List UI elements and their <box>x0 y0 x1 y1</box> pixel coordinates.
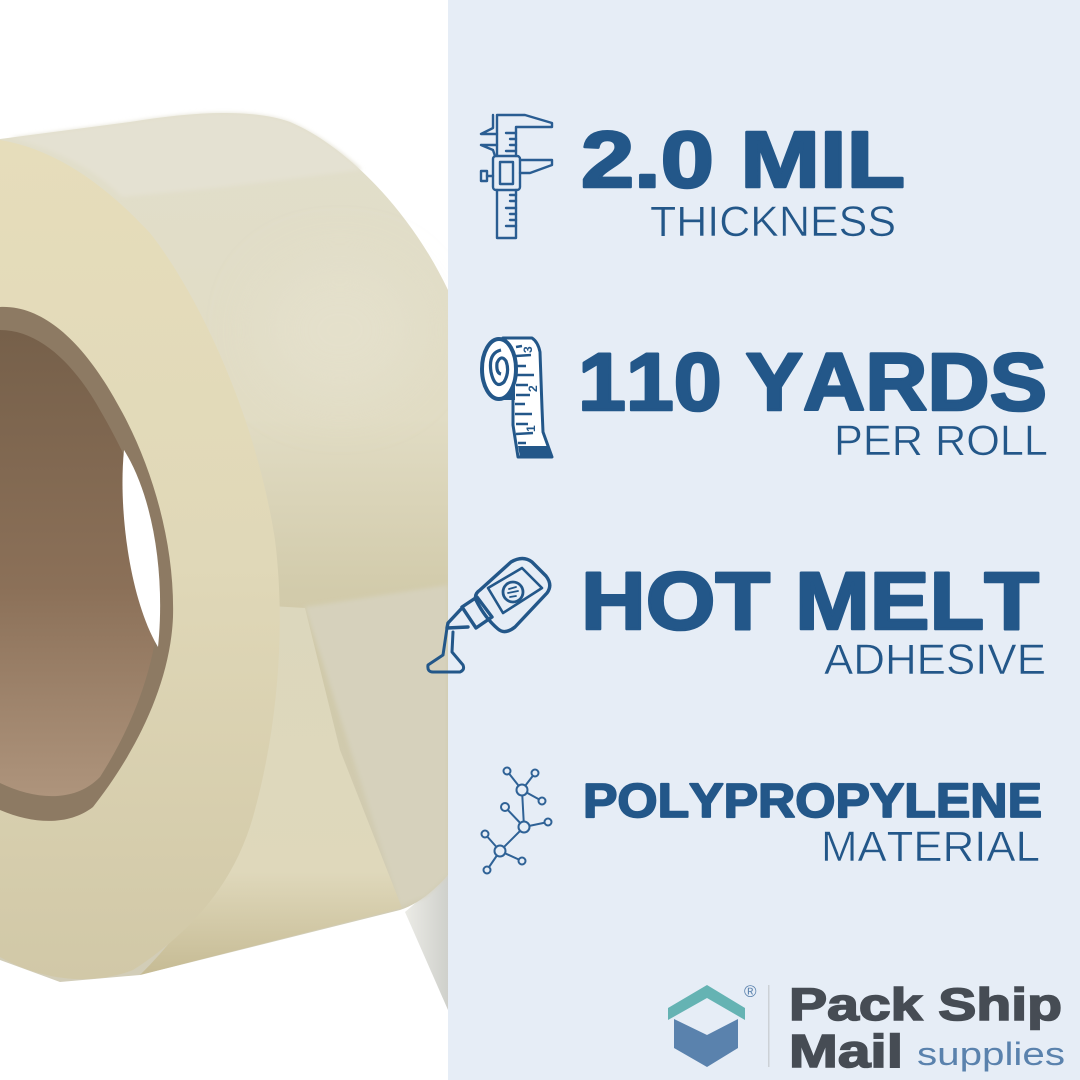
tape outer wall <box>0 113 448 982</box>
logo wordmark: Pack Ship <box>789 979 1062 1030</box>
label: material: MATERIAL <box>821 823 1040 871</box>
spec: material <box>482 768 1042 874</box>
logo mark: ® <box>744 982 757 1001</box>
spec: thickness <box>481 115 905 246</box>
logo mark <box>668 982 757 1067</box>
icon: tape measure <box>482 338 552 457</box>
heading: 110 yards: 110 YARDS <box>578 337 1047 428</box>
icon: caliper <box>481 115 552 238</box>
spec: adhesive <box>428 556 1046 684</box>
hole in core <box>122 450 160 647</box>
folded cream film <box>140 606 402 975</box>
greyish lower wall <box>305 585 448 906</box>
icon: molecule <box>482 768 552 874</box>
icon: tape measure: 3 <box>521 346 535 353</box>
cardboard core rim <box>0 307 173 821</box>
icon: glue bottle <box>428 558 550 672</box>
label: thickness: THICKNESS <box>650 198 896 246</box>
top band highlight <box>10 113 362 197</box>
label: per roll: PER ROLL <box>834 417 1048 465</box>
wall sheen <box>260 260 420 400</box>
logo: Pack Ship Mail supplies <box>668 979 1065 1077</box>
spec: length <box>482 337 1048 465</box>
label: adhesive: ADHESIVE <box>824 636 1046 684</box>
logo wordmark: Mail <box>789 1025 903 1077</box>
logo wordmark <box>789 979 1065 1077</box>
cardboard core inside <box>0 330 159 796</box>
logo wordmark: supplies <box>917 1036 1065 1072</box>
icon: tape measure: 2 <box>526 385 540 392</box>
roll end face <box>0 140 280 979</box>
heading: 2.0 MIL: 2.0 MIL <box>581 115 905 204</box>
hanging translucent film <box>405 875 448 1010</box>
icon: tape measure: 1 <box>524 425 538 432</box>
heading: hot melt: HOT MELT <box>581 556 1039 647</box>
heading: polypropylene: POLYPROPYLENE <box>583 775 1042 828</box>
product photo: tape roll <box>0 0 448 1080</box>
right panel background <box>448 0 1080 1080</box>
